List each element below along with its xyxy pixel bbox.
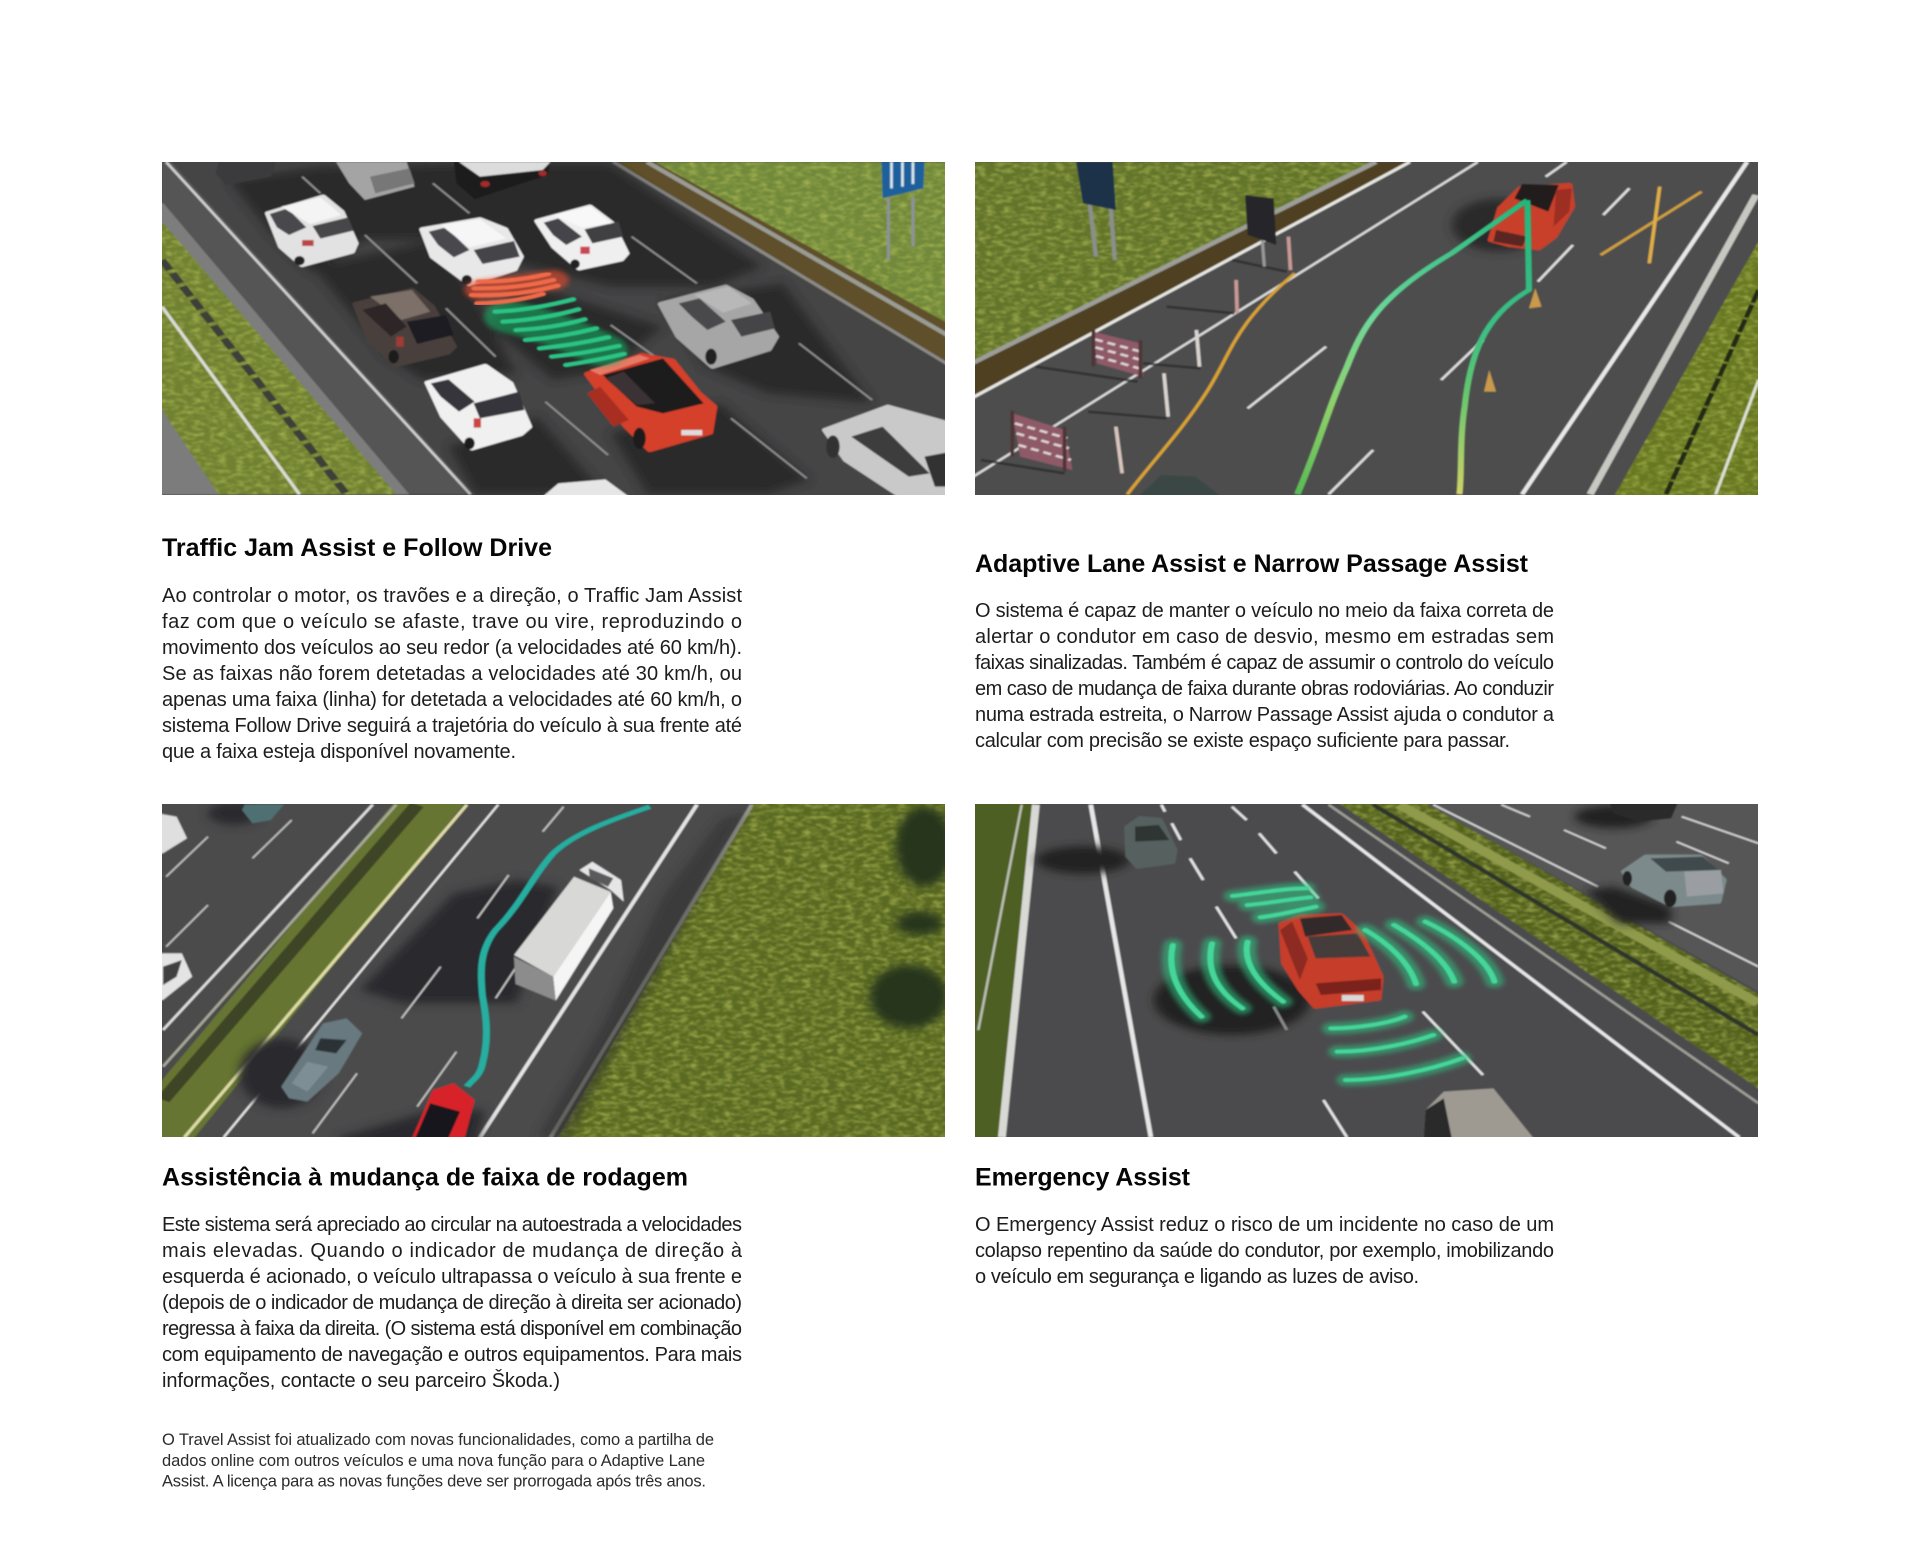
car shadows (229, 163, 872, 494)
lane dashes (1248, 162, 1629, 494)
text: adaptive lane assist: alertar o condutor em caso de desvio, mesmo em estradas sem (975, 626, 1554, 648)
red car (1280, 915, 1381, 1007)
red car (407, 1083, 475, 1150)
text: adaptive lane assist: numa estrada estreita, o Narrow Passage Assist ajuda o condutor a (975, 704, 1555, 726)
grass verge right (613, 162, 960, 373)
text: adaptive lane assist: O sistema é capaz de manter o veículo no meio da faixa correta de (975, 600, 1554, 622)
text: traffic jam assist: que a faixa esteja disponível novamente. (162, 741, 516, 763)
text: adaptive lane assist: faixas sinalizadas. Também é capaz de assumir o controlo do veículo (975, 652, 1554, 674)
text: traffic jam assist: Se as faixas não forem detetadas a velocidades até 30 km/h, ou (162, 663, 742, 685)
text: traffic jam assist: faz com que o veículo se afaste, trave ou vire, reproduzindo o (162, 611, 742, 633)
lane dashes (166, 807, 564, 1133)
text: lane change assist: regressa à faixa da direita. (O sistema está disponível em combinação (162, 1318, 742, 1340)
footnote: travel assist (162, 1431, 714, 1490)
signs (1076, 162, 1276, 267)
text: lane change assist: com equipamento de navegação e outros equipamentos. Para mais (162, 1344, 742, 1366)
oncoming car (1138, 475, 1221, 497)
text: emergency assist: O Emergency Assist reduz o risco de um incidente no caso de um (975, 1214, 1554, 1236)
footnote: travel assist: O Travel Assist foi atualizado com novas funcionalidades, como a partilha de (162, 1431, 714, 1449)
text: traffic jam assist: apenas uma faixa (linha) for detetada a velocidades até 60 km/h, o (162, 689, 742, 711)
text: emergency assist: colapso repentino da saúde do condutor, por exemplo, imobilizando (975, 1240, 1554, 1262)
grey car (281, 1018, 362, 1102)
text: traffic jam assist (162, 585, 742, 763)
shadows (208, 802, 747, 1150)
heading: lane change assist: Assistência à mudança de faixa de rodagem (162, 1164, 688, 1192)
left verge and fence (140, 200, 409, 494)
red car (587, 355, 714, 450)
text: emergency assist (975, 1214, 1554, 1288)
grass right and edge lines (1522, 162, 1780, 520)
field right (551, 800, 960, 1150)
text: lane change assist: (depois de o indicador de mudança de direção à direita ser acionado) (162, 1292, 742, 1314)
orange temporary lines (1127, 187, 1702, 494)
lane dashes (1161, 805, 1483, 1137)
median (140, 800, 697, 1150)
photo: lane change assist (162, 804, 945, 1137)
median and right carriageway (1303, 800, 1780, 1137)
side cars (140, 805, 284, 1000)
green guide paths (1297, 200, 1529, 494)
radar waves (1171, 888, 1494, 1080)
text: adaptive lane assist: em caso de mudança de faixa durante obras rodoviárias. Ao conduzir (975, 678, 1554, 700)
red car (1491, 184, 1572, 248)
text: lane change assist (162, 1214, 743, 1392)
text: lane change assist: informações, contacte o seu parceiro Škoda.) (162, 1369, 560, 1392)
left verge (960, 800, 1151, 1150)
lane dashes (302, 177, 872, 478)
heading: adaptive lane assist: Adaptive Lane Assist e Narrow Passage Assist (975, 550, 1529, 578)
text: lane change assist: mais elevadas. Quando o indicador de mudança de direção à (162, 1240, 743, 1262)
truck (514, 862, 624, 1001)
text: traffic jam assist: movimento dos veículos ao seu redor (a velocidades até 60 km/h). (162, 637, 742, 659)
text: lane change assist: esquerda é acionado, o veículo ultrapassa o veículo à sua frente e (162, 1266, 742, 1288)
sensor waves (472, 274, 624, 365)
photo: emergency assist (975, 804, 1758, 1137)
shadows (1036, 805, 1671, 1035)
barriers (1012, 330, 1143, 472)
shadows of roadworks (981, 260, 1287, 473)
heading: traffic jam assist: Traffic Jam Assist e Follow Drive (162, 534, 552, 562)
text: lane change assist: Este sistema será apreciado ao circular na autoestrada a velocidades (162, 1214, 742, 1236)
text: adaptive lane assist: calcular com precisão se existe espaço suficiente para passar. (975, 730, 1510, 752)
grass left and verge (960, 162, 1478, 482)
photo: traffic jam assist (162, 162, 945, 495)
teal path (467, 807, 650, 1087)
photo: adaptive lane assist (975, 162, 1758, 495)
other cars (1127, 800, 1724, 1150)
text: emergency assist: o veículo em segurança e ligando as luzes de aviso. (975, 1266, 1419, 1288)
text: adaptive lane assist (975, 600, 1555, 752)
heading: emergency assist: Emergency Assist (975, 1164, 1191, 1192)
cones (1484, 288, 1542, 392)
footnote: travel assist: dados online com outros veículos e uma nova função para o Adaptive Lane (162, 1452, 705, 1470)
footnote: travel assist: Assist. A licença para as novas funções deve ser prorrogada após três anos. (162, 1472, 706, 1490)
sign (882, 162, 924, 260)
roadworks poles (1116, 237, 1291, 473)
right road markings (1433, 805, 1759, 967)
surrounding cars (216, 162, 960, 497)
text: traffic jam assist: Ao controlar o motor, os travões e a direção, o Traffic Jam Assist (162, 585, 742, 607)
text: traffic jam assist: sistema Follow Drive seguirá a trajetória do veículo à sua frente até (162, 715, 742, 737)
